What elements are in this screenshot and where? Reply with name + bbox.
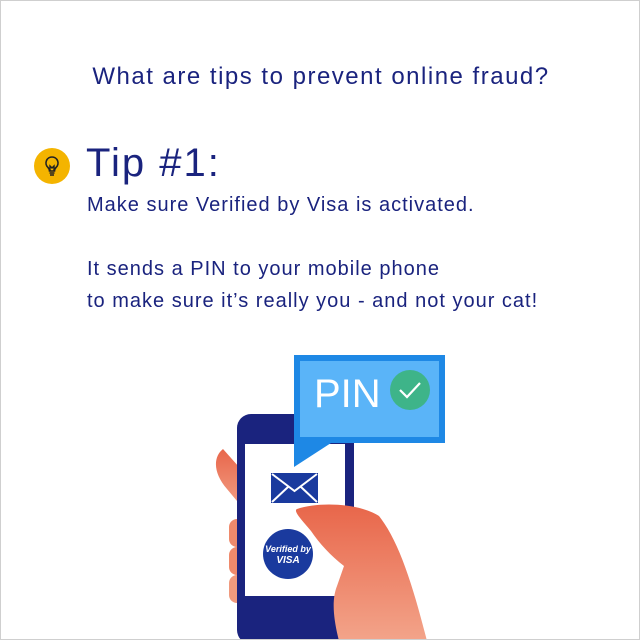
hand: back fingers <box>216 449 247 603</box>
speech bubble: PIN <box>294 355 445 467</box>
text block: tip body: It sends a PIN to your mobile phone <box>87 258 440 280</box>
title: What are tips to prevent online fraud? <box>92 63 550 90</box>
icon: envelope <box>271 473 318 503</box>
heading: tip: Tip #1: <box>86 141 221 185</box>
logo: verified by visa: VISA <box>276 555 300 566</box>
logo: verified by visa <box>263 529 313 579</box>
hand: thumb and palm <box>296 505 427 640</box>
text block: tip body: Make sure Verified by Visa is activated. <box>87 194 475 216</box>
logo: verified by visa: Verified by <box>265 544 312 554</box>
icon: lightbulb <box>34 148 70 184</box>
speech bubble: PIN: PIN <box>314 372 381 416</box>
phone <box>237 414 354 640</box>
text block: tip body: to make sure it’s really you - and not your cat! <box>87 290 538 312</box>
text block: tip body <box>87 194 538 312</box>
